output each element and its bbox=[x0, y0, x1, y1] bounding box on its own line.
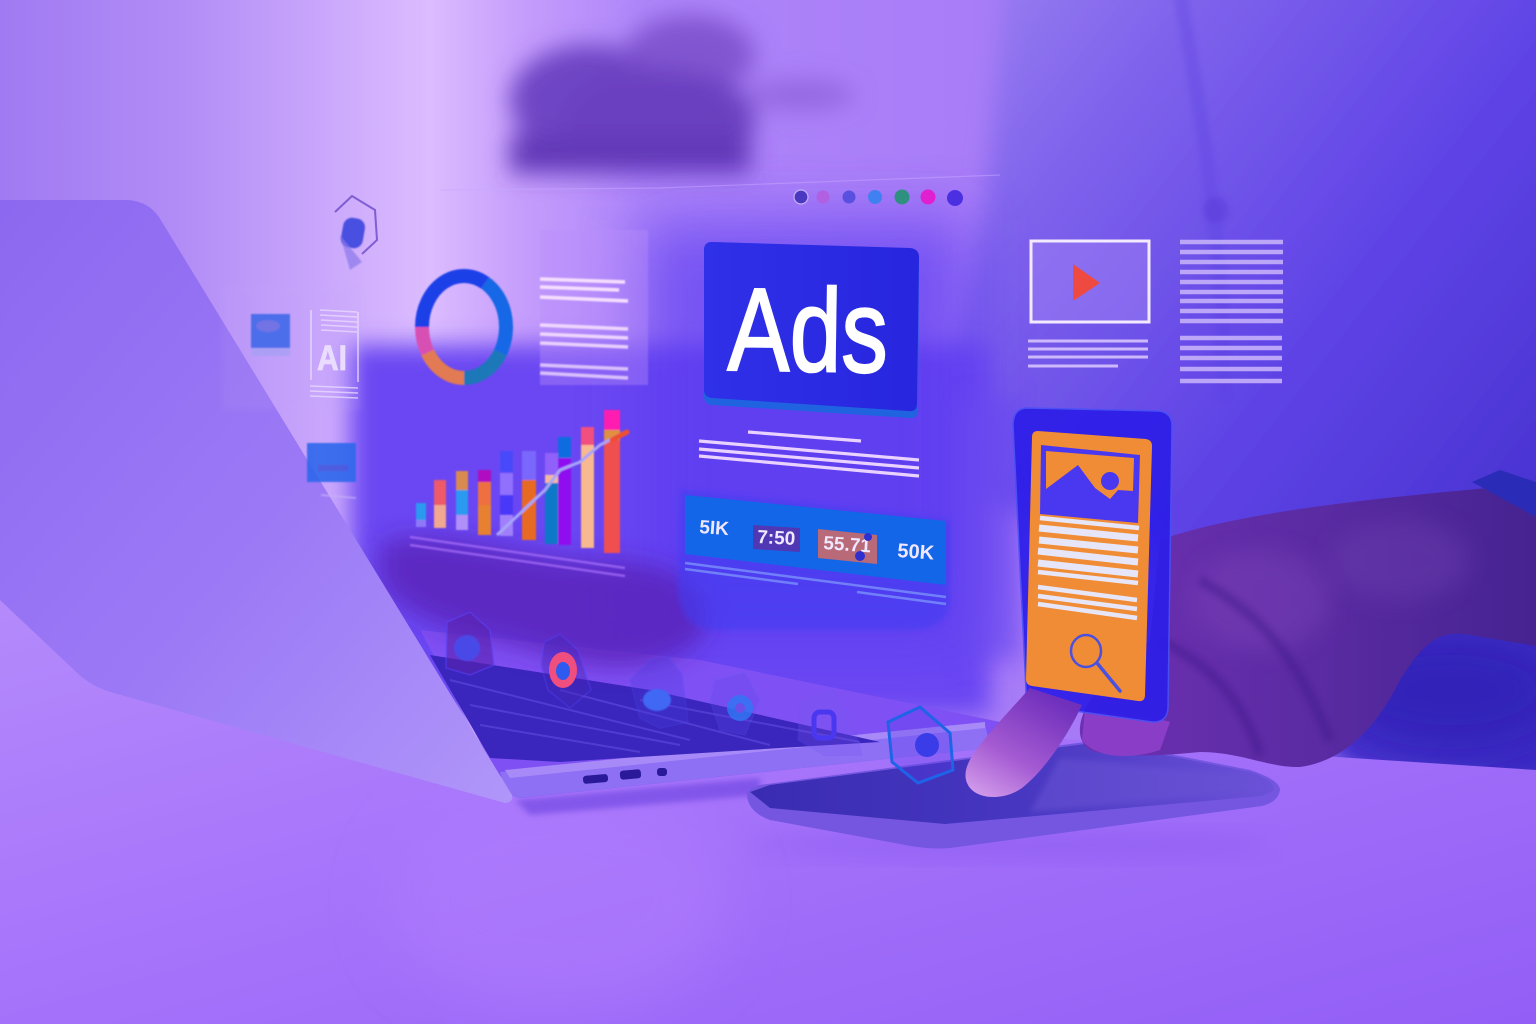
stat box: 55.7 bbox=[818, 529, 877, 564]
bar chart bbox=[416, 410, 627, 553]
trend line bbox=[497, 432, 625, 535]
glass card bbox=[1013, 408, 1172, 722]
ad card bbox=[1013, 408, 1172, 722]
background: dark mid band behind panels bbox=[350, 220, 1020, 715]
icon: blue hexagon 4 bbox=[710, 672, 760, 735]
icon: magnifying glass bbox=[1071, 635, 1120, 691]
stat: 7:50: 7:50 bbox=[757, 527, 796, 550]
icon: play button bbox=[1073, 264, 1100, 301]
stats bar bbox=[685, 495, 946, 585]
icon: A hexagon bbox=[446, 612, 494, 675]
image placeholder bbox=[1040, 445, 1140, 523]
table surface bbox=[0, 600, 1536, 1024]
card text lines bbox=[1038, 518, 1139, 618]
Ads panel bbox=[704, 242, 919, 418]
stat: 50K: 50K bbox=[897, 540, 935, 565]
video side text lines bbox=[1180, 242, 1283, 381]
stat: 5IK: 5IK bbox=[699, 517, 730, 540]
icon: blue hexagon 3 bbox=[630, 656, 688, 728]
background: blurred plant bbox=[510, 15, 855, 173]
laptop ports bbox=[583, 768, 667, 784]
thumbnail: bottom bbox=[307, 443, 356, 498]
laptop base bbox=[420, 630, 1000, 798]
orange card bbox=[1026, 431, 1152, 701]
icon: floating hexagon top bbox=[335, 196, 377, 270]
AI label: AI bbox=[317, 339, 347, 378]
stat: 55.7: 55.71 bbox=[823, 533, 872, 557]
colour dots row bbox=[440, 175, 1000, 206]
panel base lines bbox=[410, 537, 625, 576]
glass panel: left column bbox=[222, 196, 377, 498]
video frame bbox=[1031, 241, 1149, 322]
hand pointing at phone bbox=[1080, 470, 1536, 767]
floating app icons bbox=[446, 612, 862, 756]
text lines beside donut bbox=[540, 279, 628, 378]
background: person's shirt bbox=[940, 0, 1536, 800]
video block bbox=[1028, 241, 1149, 366]
laptop lid bbox=[0, 200, 512, 803]
video caption lines bbox=[1028, 341, 1148, 366]
glass panel around stats bbox=[678, 490, 950, 630]
glass panel: analytics bbox=[410, 230, 648, 576]
Ads heading: Ads bbox=[727, 264, 889, 398]
blurred hand over keyboard bbox=[380, 537, 706, 668]
thumbnail: top bbox=[251, 314, 290, 356]
Ads copy lines bbox=[699, 432, 919, 476]
laptop keyboard bbox=[430, 655, 880, 762]
donut chart bbox=[422, 276, 506, 378]
icon: blue hexagon 5 bbox=[798, 690, 862, 756]
stats footer lines bbox=[685, 563, 946, 604]
phone bbox=[747, 740, 1280, 859]
icon: pink ring bbox=[541, 634, 591, 708]
AI document bbox=[310, 310, 358, 398]
icon: bright hexagon bbox=[888, 707, 953, 783]
shirt cuff bbox=[1472, 470, 1536, 530]
background: blurred room wall bbox=[0, 0, 1536, 800]
stat box: 7:50 bbox=[753, 525, 800, 552]
index finger touching phone bbox=[965, 688, 1082, 797]
